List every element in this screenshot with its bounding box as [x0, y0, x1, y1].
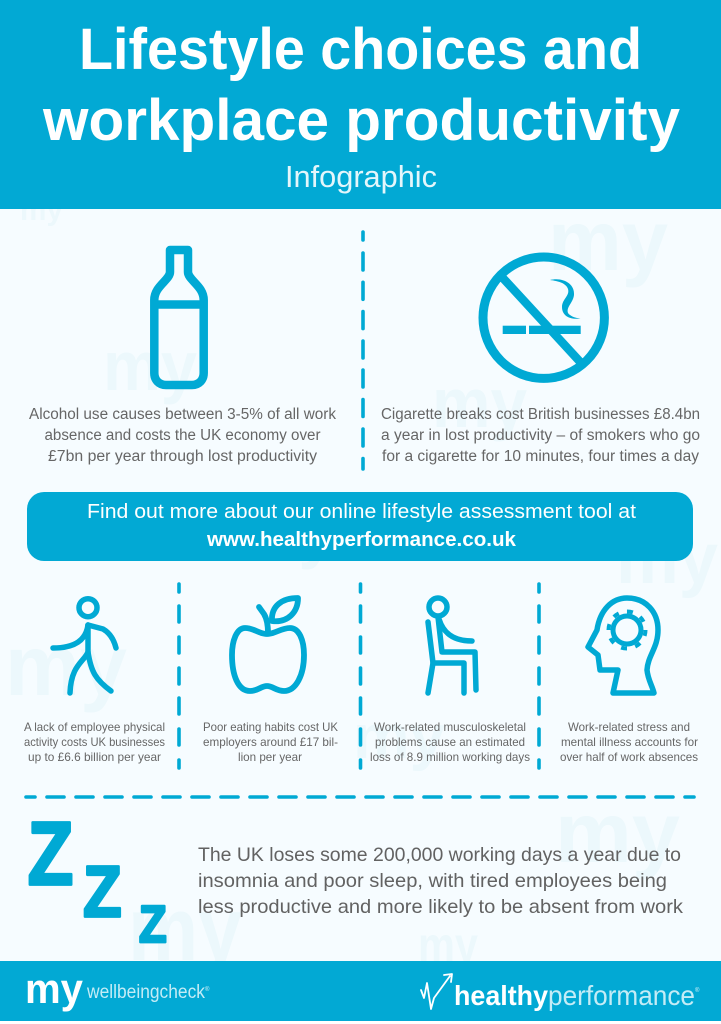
- icon: sleeping Zs: [28, 804, 167, 954]
- infographic canvas: my: [128, 880, 242, 980]
- alcohol text: absence and costs the UK economy over: [44, 427, 320, 444]
- sleep text: [198, 844, 683, 918]
- smoking text: a year in lost productivity – of smokers who go: [381, 427, 700, 444]
- musculoskeletal text: [370, 720, 530, 764]
- eating text: employers around £17 bil-: [203, 735, 338, 749]
- mental health text: Work-related stress and: [568, 720, 690, 734]
- sleep text: insomnia and poor sleep, with tired employees being: [198, 870, 667, 892]
- icon: no smoking: [483, 257, 604, 378]
- musculoskeletal text: loss of 8.9 million working days: [370, 750, 530, 764]
- icon: sleeping Zs: Z: [139, 896, 167, 954]
- alcohol text: [29, 406, 336, 465]
- logo: my wellbeingcheck: ®: [205, 986, 210, 993]
- sleep text: The UK loses some 200,000 working days a year due to: [198, 844, 681, 866]
- panel: physical activity: [24, 599, 165, 764]
- infographic canvas: my: [240, 492, 335, 570]
- infographic canvas: my: [432, 364, 527, 442]
- activity text: up to £6.6 billion per year: [28, 750, 161, 764]
- logo: my wellbeingcheck: wellbeingcheck: [86, 982, 205, 1003]
- panel: musculoskeletal: [370, 598, 530, 764]
- icon: apple: [232, 598, 304, 691]
- header band: [0, 0, 721, 209]
- musculoskeletal text: problems cause an estimated: [375, 735, 525, 749]
- title: workplace productivity: [42, 88, 680, 153]
- smoking text: [381, 406, 700, 465]
- musculoskeletal text: Work-related musculoskeletal: [374, 720, 526, 734]
- mental health text: mental illness accounts for: [561, 735, 698, 749]
- alcohol text: £7bn per year through lost productivity: [48, 448, 317, 465]
- logo: my wellbeingcheck: my: [25, 965, 84, 1012]
- activity text: activity costs UK businesses: [24, 735, 165, 749]
- infographic canvas: my: [20, 194, 63, 227]
- panel: sleep: [28, 804, 683, 954]
- icon: bottle: [154, 250, 204, 385]
- icon: seated person: [428, 598, 476, 693]
- icon: sleeping Zs: Z: [83, 852, 122, 932]
- infographic canvas: my: [418, 917, 478, 973]
- panel: smoking: [381, 257, 700, 465]
- subtitle: Infographic: [285, 159, 437, 194]
- callout banner: Find out more about our online lifestyle assessment tool at: [87, 501, 636, 523]
- infographic canvas: my: [548, 194, 668, 289]
- eating text: [203, 720, 338, 764]
- panel: alcohol: [29, 250, 336, 465]
- logo: healthy performance: [421, 974, 700, 1011]
- activity text: [24, 720, 165, 764]
- callout banner: www.healthyperformance.co.uk: [206, 529, 517, 551]
- icon: sleeping Zs: Z: [28, 804, 74, 904]
- infographic canvas: my: [555, 786, 680, 881]
- infographic canvas: my: [5, 619, 127, 714]
- logo: healthy performance: healthy: [454, 980, 548, 1011]
- callout banner: [27, 492, 693, 561]
- mental health text: [560, 720, 698, 764]
- activity text: A lack of employee physical: [24, 720, 165, 734]
- logo: healthy performance: performance: [548, 980, 695, 1011]
- logo: healthy performance: ®: [695, 987, 700, 994]
- alcohol text: Alcohol use causes between 3-5% of all work: [29, 406, 336, 423]
- panel: eating: [203, 598, 338, 764]
- sleep text: less productive and more likely to be absent from work: [198, 896, 683, 918]
- logo: my wellbeingcheck: [25, 965, 210, 1012]
- eating text: Poor eating habits cost UK: [203, 720, 338, 734]
- infographic canvas: my: [353, 703, 446, 772]
- panel: mental health: [560, 598, 698, 764]
- title: Lifestyle choices and: [79, 17, 642, 82]
- icon: head with gear: [588, 598, 658, 693]
- infographic canvas: my: [103, 327, 197, 405]
- smoking text: Cigarette breaks cost British businesses £8.4bn: [381, 406, 700, 423]
- infographic canvas: my: [616, 519, 718, 599]
- footer band: [0, 961, 721, 1024]
- smoking text: for a cigarette for 10 minutes, four times a day: [382, 448, 699, 465]
- icon: walking person: [53, 599, 116, 693]
- title: [42, 17, 680, 153]
- eating text: lion per year: [238, 750, 302, 764]
- mental health text: over half of work absences: [560, 750, 698, 764]
